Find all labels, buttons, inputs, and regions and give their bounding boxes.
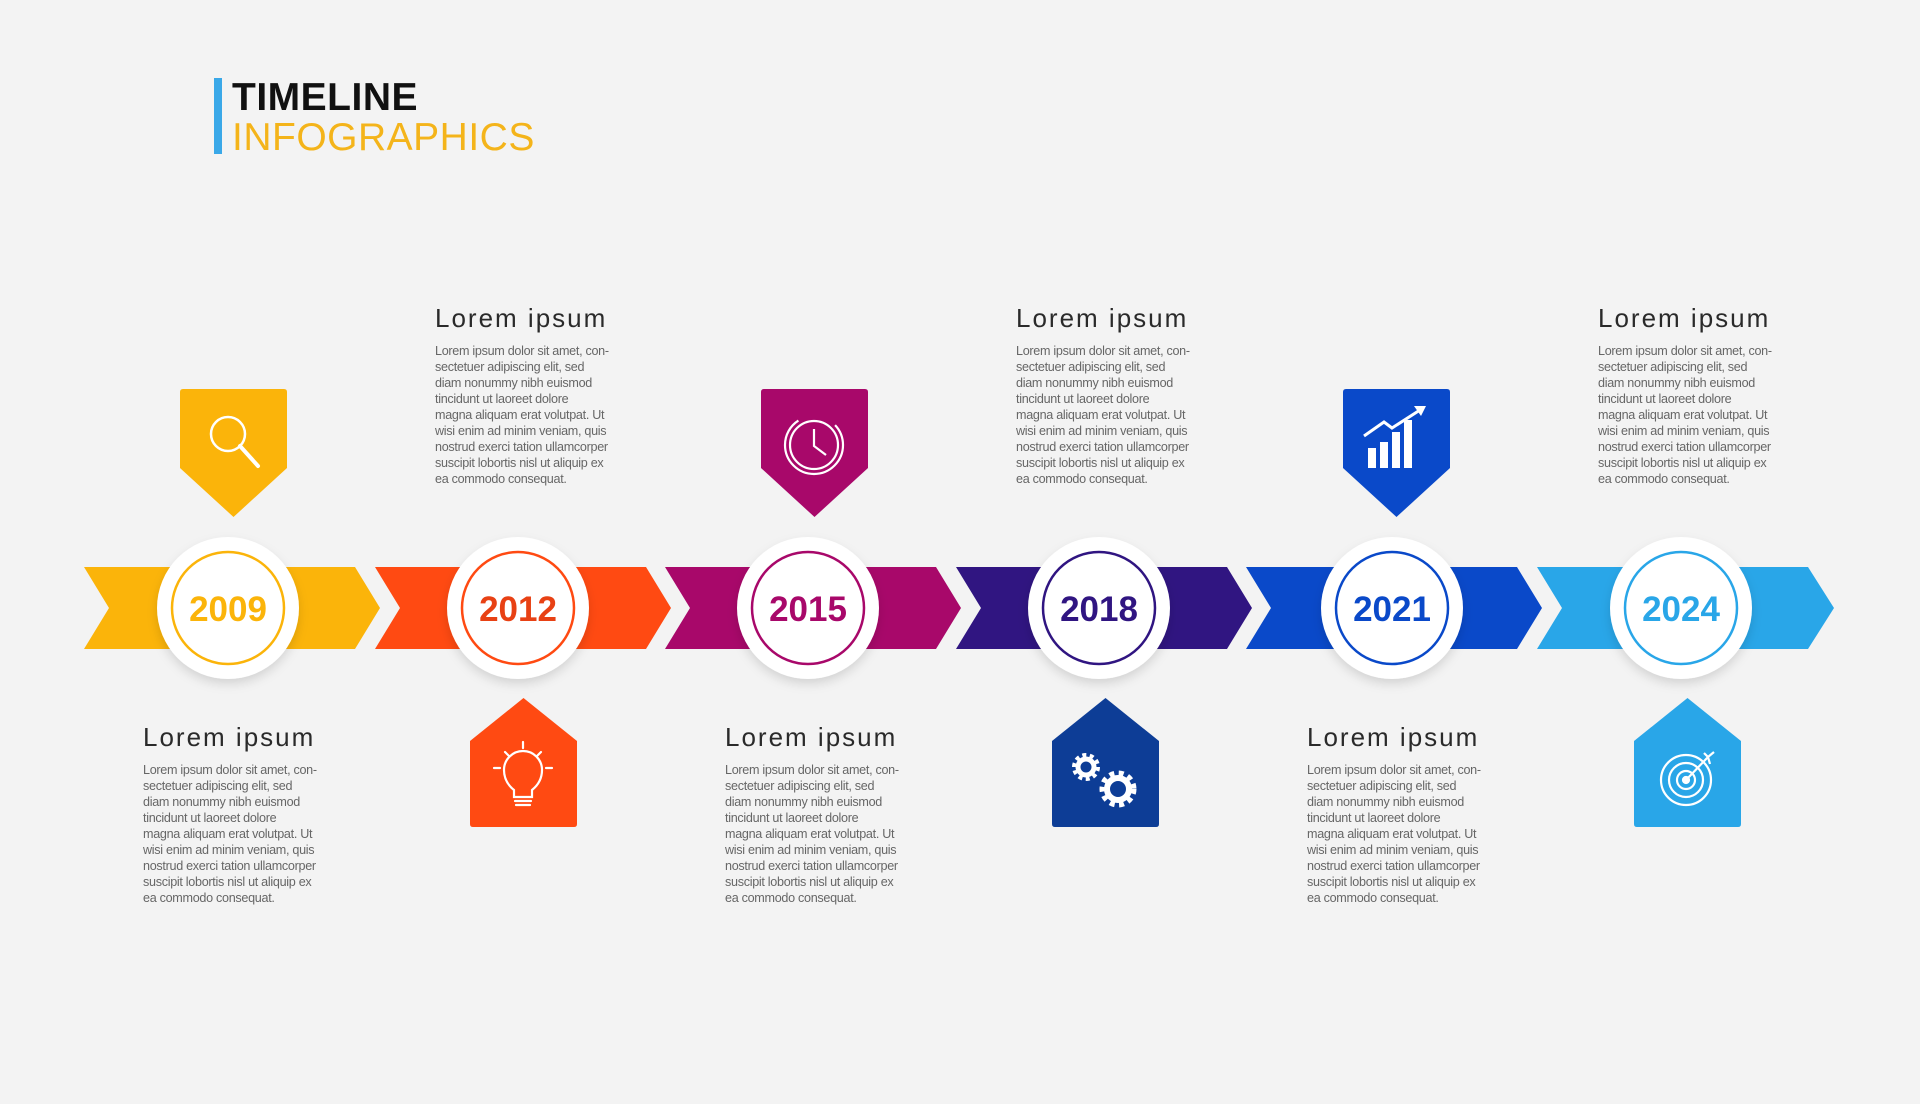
year circles: 2021 <box>1353 590 1431 629</box>
text: 2009: magna aliquam erat volutpat. Ut <box>143 827 312 841</box>
icon: chart pin <box>1343 389 1450 517</box>
icon: target house <box>1634 698 1741 827</box>
text: 2012: nostrud exerci tation ullamcorper <box>435 440 608 454</box>
text: 2024: ea commodo consequat. <box>1598 472 1730 486</box>
text: 2018: Lorem ipsum <box>1016 303 1188 333</box>
text: 2021: tincidunt ut laoreet dolore <box>1307 811 1440 825</box>
text: 2021: magna aliquam erat volutpat. Ut <box>1307 827 1476 841</box>
text: 2024: diam nonummy nibh euismod <box>1598 376 1755 390</box>
text: 2024: suscipit lobortis nisl ut aliquip ex <box>1598 456 1766 470</box>
icon: clock pin <box>761 389 868 517</box>
text: 2018: suscipit lobortis nisl ut aliquip ex <box>1016 456 1184 470</box>
text: 2009: ea commodo consequat. <box>143 891 275 905</box>
text: 2009: Lorem ipsum <box>143 722 315 752</box>
text: 2018: sectetuer adipiscing elit, sed <box>1016 360 1165 374</box>
icon: search pin <box>180 389 287 517</box>
text: 2018: tincidunt ut laoreet dolore <box>1016 392 1149 406</box>
text: 2021: suscipit lobortis nisl ut aliquip ex <box>1307 875 1475 889</box>
text: 2009: Lorem ipsum dolor sit amet, con- <box>143 763 317 777</box>
text: 2012 <box>435 303 609 486</box>
text: 2015: suscipit lobortis nisl ut aliquip ex <box>725 875 893 889</box>
text: 2015: nostrud exerci tation ullamcorper <box>725 859 898 873</box>
text: 2021: wisi enim ad minim veniam, quis <box>1307 843 1478 857</box>
text: 2009: nostrud exerci tation ullamcorper <box>143 859 316 873</box>
year circles: 2018 <box>1060 590 1138 629</box>
text: 2021 <box>1307 722 1481 905</box>
text: 2018: wisi enim ad minim veniam, quis <box>1016 424 1187 438</box>
text: 2021: diam nonummy nibh euismod <box>1307 795 1464 809</box>
year circles: 2009 <box>189 590 267 629</box>
text: 2018: diam nonummy nibh euismod <box>1016 376 1173 390</box>
text: 2024 <box>1598 303 1772 486</box>
icon: gears house <box>1052 698 1159 827</box>
text: 2018: ea commodo consequat. <box>1016 472 1148 486</box>
text: 2018: magna aliquam erat volutpat. Ut <box>1016 408 1185 422</box>
year circles: 2012 <box>479 590 557 629</box>
text: 2024: magna aliquam erat volutpat. Ut <box>1598 408 1767 422</box>
text: 2015: magna aliquam erat volutpat. Ut <box>725 827 894 841</box>
text: 2009: sectetuer adipiscing elit, sed <box>143 779 292 793</box>
text: 2018 <box>1016 303 1190 486</box>
text: 2015: diam nonummy nibh euismod <box>725 795 882 809</box>
text: 2012: ea commodo consequat. <box>435 472 567 486</box>
text: 2015: wisi enim ad minim veniam, quis <box>725 843 896 857</box>
text: 2012: Lorem ipsum dolor sit amet, con- <box>435 344 609 358</box>
text: 2024: sectetuer adipiscing elit, sed <box>1598 360 1747 374</box>
text: 2012: Lorem ipsum <box>435 303 607 333</box>
text: 2012: diam nonummy nibh euismod <box>435 376 592 390</box>
text: 2009 <box>143 722 317 905</box>
icon: bulb house <box>470 698 577 827</box>
text: 2024: Lorem ipsum dolor sit amet, con- <box>1598 344 1772 358</box>
text: 2015: tincidunt ut laoreet dolore <box>725 811 858 825</box>
title: INFOGRAPHICS <box>232 116 535 159</box>
text: 2021: ea commodo consequat. <box>1307 891 1439 905</box>
year circles: 2015 <box>769 590 847 629</box>
title: TIMELINE <box>232 76 418 119</box>
text: 2015: Lorem ipsum <box>725 722 897 752</box>
text: 2024: wisi enim ad minim veniam, quis <box>1598 424 1769 438</box>
text: 2012: suscipit lobortis nisl ut aliquip ex <box>435 456 603 470</box>
text: 2009: tincidunt ut laoreet dolore <box>143 811 276 825</box>
title <box>214 76 535 159</box>
text: 2021: Lorem ipsum <box>1307 722 1479 752</box>
text: 2009: diam nonummy nibh euismod <box>143 795 300 809</box>
text: 2021: nostrud exerci tation ullamcorper <box>1307 859 1480 873</box>
arrow band segments <box>84 567 1834 649</box>
text: 2021: Lorem ipsum dolor sit amet, con- <box>1307 763 1481 777</box>
text: 2015: Lorem ipsum dolor sit amet, con- <box>725 763 899 777</box>
text: 2018: Lorem ipsum dolor sit amet, con- <box>1016 344 1190 358</box>
text: 2015 <box>725 722 899 905</box>
text: 2012: wisi enim ad minim veniam, quis <box>435 424 606 438</box>
year circles: 2024 <box>1642 590 1720 629</box>
text: 2012: magna aliquam erat volutpat. Ut <box>435 408 604 422</box>
text: 2015: sectetuer adipiscing elit, sed <box>725 779 874 793</box>
text: 2012: sectetuer adipiscing elit, sed <box>435 360 584 374</box>
text: 2021: sectetuer adipiscing elit, sed <box>1307 779 1456 793</box>
text: 2009: wisi enim ad minim veniam, quis <box>143 843 314 857</box>
text: 2012: tincidunt ut laoreet dolore <box>435 392 568 406</box>
year circles <box>157 537 1752 679</box>
text: 2024: Lorem ipsum <box>1598 303 1770 333</box>
text: 2015: ea commodo consequat. <box>725 891 857 905</box>
text: 2018: nostrud exerci tation ullamcorper <box>1016 440 1189 454</box>
text: 2024: tincidunt ut laoreet dolore <box>1598 392 1731 406</box>
text: 2009: suscipit lobortis nisl ut aliquip ex <box>143 875 311 889</box>
text: 2024: nostrud exerci tation ullamcorper <box>1598 440 1771 454</box>
